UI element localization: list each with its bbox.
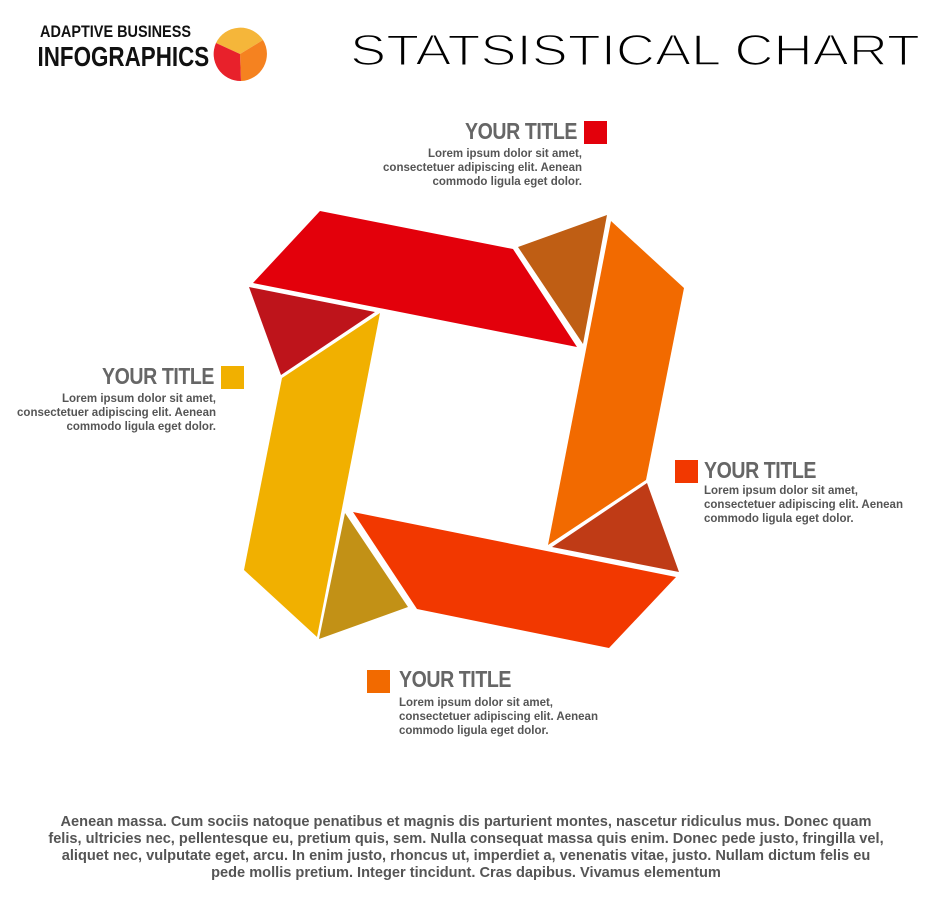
- text: YOUR TITLE: [102, 363, 214, 389]
- footer text: pede mollis pretium. Integer tincidunt. Cras dapibus. Vivamus elementum: [211, 865, 721, 881]
- text: consectetuer adipiscing elit. Aenean: [17, 407, 216, 419]
- text: Lorem ipsum dolor sit amet,: [704, 485, 858, 497]
- text: consectetuer adipiscing elit. Aenean: [704, 499, 903, 511]
- callout: right: [675, 457, 903, 525]
- text: commodo ligula eget dolor.: [399, 725, 549, 737]
- text: YOUR TITLE: [399, 666, 511, 692]
- footer text: [48, 814, 884, 881]
- callout: bottom: [367, 666, 598, 737]
- icon: pie logo: [214, 28, 267, 81]
- text: YOUR TITLE: [465, 118, 577, 144]
- footer text: aliquet nec, vulputate eget, arcu. In enim justo, rhoncus ut, imperdiet a, venenatis vitae, justo. Nullam dictum felis eu: [62, 848, 870, 864]
- text: commodo ligula eget dolor.: [66, 421, 216, 433]
- footer text: felis, ultricies nec, pellentesque eu, pretium quis, sem. Nulla consequat massa quis enim. Donec pede justo, fringilla vel,: [48, 831, 884, 847]
- text: consectetuer adipiscing elit. Aenean: [383, 162, 582, 174]
- callout: left: [17, 363, 244, 433]
- text: Lorem ipsum dolor sit amet,: [399, 697, 553, 709]
- brand logo text: [38, 22, 209, 72]
- text: consectetuer adipiscing elit. Aenean: [399, 711, 598, 723]
- text: commodo ligula eget dolor.: [704, 513, 854, 525]
- text: Lorem ipsum dolor sit amet,: [62, 393, 216, 405]
- brand logo text: ADAPTIVE BUSINESS: [40, 22, 191, 41]
- text: Lorem ipsum dolor sit amet,: [428, 148, 582, 160]
- text: commodo ligula eget dolor.: [432, 176, 582, 188]
- title: STATSISTICAL CHART: [350, 26, 920, 75]
- text: YOUR TITLE: [704, 457, 816, 483]
- callout: top: [383, 118, 607, 188]
- brand logo text: INFOGRAPHICS: [38, 41, 209, 72]
- footer text: Aenean massa. Cum sociis natoque penatibus et magnis dis parturient montes, nascetur ridiculus mus. Donec quam: [61, 814, 871, 830]
